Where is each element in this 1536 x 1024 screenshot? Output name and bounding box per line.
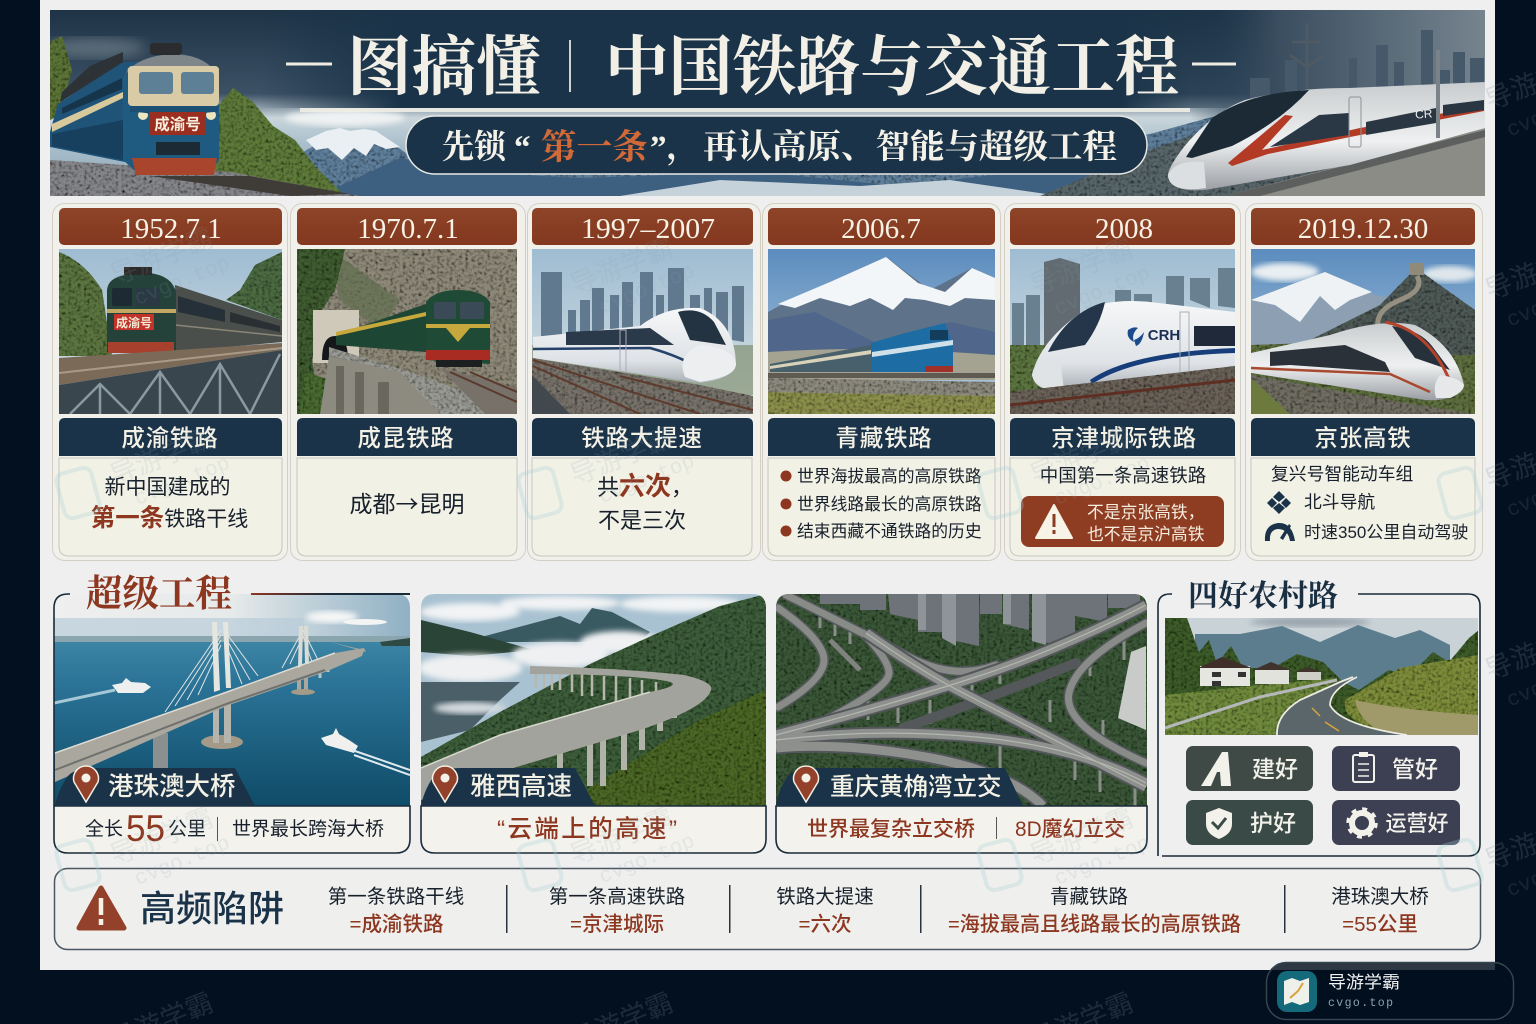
main title: 图搞懂	[347, 32, 541, 104]
strip	[776, 806, 1147, 853]
frame	[54, 594, 70, 806]
photo: CRH train: CRH	[1148, 327, 1180, 344]
watermarks: 导游学霸	[1026, 803, 1137, 871]
icon: speedometer	[1265, 523, 1295, 541]
body: 共六次，	[597, 471, 693, 501]
trap 1	[328, 886, 464, 936]
header banner	[45, 10, 1485, 196]
train name plate: 成渝号	[154, 114, 201, 134]
panel: 雅西高速	[418, 594, 766, 853]
heading: 高频陷阱	[140, 888, 284, 929]
watermarks: cvgo.top	[132, 253, 234, 312]
date tab	[1010, 208, 1235, 245]
name band	[768, 418, 995, 456]
trap 5: =55公里	[1342, 913, 1418, 936]
stats: 全长	[85, 818, 123, 840]
name band	[297, 418, 517, 456]
label tab: 港珠澳大桥	[108, 773, 236, 801]
date tab: 2008	[1095, 213, 1153, 245]
label tab: 重庆黄桷湾立交	[830, 773, 1002, 801]
trap 3: =六次	[799, 913, 851, 936]
stats: 世界最长跨海大桥	[232, 818, 384, 840]
body: 北斗导航	[1304, 492, 1375, 512]
label tab	[55, 766, 255, 806]
quote: “云端上的高速”	[497, 815, 677, 843]
watermarks: cvgo.top	[1052, 833, 1154, 892]
date tab: 1970.7.1	[357, 213, 459, 245]
card 3: 铁路大提速	[528, 204, 760, 560]
body	[297, 458, 517, 556]
warning callout: 也不是京沪高铁	[1087, 525, 1205, 544]
section heading: 超级工程: 超级工程	[86, 573, 232, 615]
name band: 京张高铁	[1314, 425, 1412, 451]
button: 运营好	[1332, 800, 1460, 845]
watermarks: cvgo.top	[1052, 453, 1154, 512]
stats: 公里	[168, 819, 206, 840]
watermarks: 导游学霸	[1026, 423, 1137, 491]
date tab	[297, 208, 517, 245]
name band: 铁路大提速	[581, 425, 703, 451]
main title: 中国铁路与交通工程	[605, 32, 1179, 104]
card 6: 京张高铁	[1246, 204, 1482, 560]
left blue locomotive	[50, 43, 219, 175]
body: 成都→昆明	[350, 485, 464, 519]
body: 世界线路最长的高原铁路	[797, 495, 982, 514]
name band: 成昆铁路	[357, 425, 455, 451]
watermarks: cvgo.top	[1052, 263, 1154, 322]
warning callout: 不是京张高铁，	[1087, 503, 1204, 522]
body: 中国第一条高速铁路	[1040, 465, 1206, 486]
subtitle pill: ”，	[650, 130, 700, 166]
photo: CRH train	[1010, 249, 1235, 414]
cream divider	[300, 108, 1190, 112]
strip	[54, 806, 410, 853]
date tab: 1952.7.1	[120, 213, 222, 245]
trap 3	[776, 886, 874, 936]
date tab	[1251, 208, 1475, 245]
body	[59, 458, 282, 556]
captions: 世界最复杂立交桥	[807, 818, 975, 841]
photo: rural road	[1165, 617, 1491, 735]
body	[1010, 458, 1235, 556]
date tab	[768, 208, 995, 245]
watermarks: 导游学霸	[566, 803, 677, 871]
card 4: 青藏铁路	[762, 204, 1000, 560]
captions	[807, 817, 1125, 841]
body	[1251, 458, 1475, 556]
train name plate	[150, 112, 205, 135]
photo: Fuxing train and Great Wall	[1251, 249, 1478, 414]
body: 新中国建成的	[104, 476, 230, 499]
icon: Beidou navigation	[1267, 491, 1291, 514]
body	[532, 458, 752, 556]
body: 不是三次	[598, 508, 686, 533]
date tab: 2019.12.30	[1298, 213, 1428, 245]
watermarks: cvgo.top	[596, 831, 698, 890]
body	[768, 458, 995, 556]
button: 管好	[1332, 746, 1460, 791]
date tab: 2006.7	[841, 213, 921, 245]
photo: green locomotive on bridge: 成渝号	[116, 315, 152, 330]
captions: 8D魔幻立交	[1015, 818, 1125, 841]
trap 4	[948, 886, 1241, 936]
label tab: 雅西高速	[470, 773, 572, 801]
right high-speed train	[1168, 50, 1485, 196]
trap 5: 港珠澳大桥	[1331, 886, 1429, 908]
stats: 55	[126, 808, 165, 849]
name band	[1251, 418, 1475, 456]
warning callout	[1021, 496, 1224, 547]
subtitle pill	[406, 116, 1147, 174]
stats	[85, 808, 384, 849]
icon: warning triangle	[79, 888, 124, 928]
photo: green locomotive on bridge	[59, 249, 282, 414]
trap 1: =成渝铁路	[350, 913, 444, 936]
trap 1: 第一条铁路干线	[328, 886, 464, 908]
watermarks: 导游学霸	[566, 423, 677, 491]
label tab	[776, 766, 1023, 806]
strip	[421, 806, 766, 853]
name band: 青藏铁路	[835, 425, 933, 451]
trap 3: 铁路大提速	[776, 886, 874, 908]
high-frequency traps bar	[54, 868, 1480, 950]
watermarks: cvgo.top	[596, 261, 698, 320]
button: 护好: 护好	[1250, 810, 1296, 836]
subtitle pill: 先锁	[442, 129, 508, 166]
watermarks: cvgo.top	[132, 453, 234, 512]
name band	[1010, 418, 1235, 456]
button: 建好	[1186, 746, 1313, 791]
brand badge	[1266, 962, 1514, 1020]
trap 2: 第一条高速铁路	[549, 886, 685, 908]
main title	[286, 32, 1236, 104]
watermarks: cvgo.top	[596, 451, 698, 510]
subtitle pill: 第一条	[541, 128, 648, 167]
name band	[532, 418, 753, 456]
button: 护好	[1186, 800, 1313, 845]
photo: blue train under snow mountains	[768, 249, 995, 414]
watermarks: 导游学霸	[106, 423, 217, 491]
watermarks: 导游学霸	[106, 803, 217, 871]
name band	[59, 418, 282, 456]
right high-speed train: CR	[1415, 106, 1433, 122]
panel: 超级工程 bridge	[54, 594, 410, 853]
body: 世界海拔最高的高原铁路	[797, 467, 982, 486]
watermarks: 导游学霸	[566, 233, 677, 301]
card 5: 京津城际铁路	[1004, 204, 1240, 560]
brand badge: cvgo.top	[1328, 997, 1393, 1010]
body: 复兴号智能动车组	[1271, 464, 1413, 484]
subtitle pill: “	[514, 130, 530, 166]
heading: 四好农村路	[1188, 580, 1338, 613]
name band: 京津城际铁路	[1051, 425, 1197, 451]
watermarks: 导游学霸	[1026, 233, 1137, 301]
button: 运营好: 运营好	[1386, 811, 1448, 836]
body: 结束西藏不通铁路的历史	[797, 522, 982, 541]
body: 时速350公里自动驾驶	[1304, 523, 1468, 542]
trap 5	[1331, 886, 1429, 936]
brand badge: 导游学霸	[1328, 973, 1400, 992]
icon: map logo	[1277, 971, 1317, 1012]
date tab	[532, 208, 753, 245]
body: 第一条铁路干线	[91, 504, 248, 532]
label tab	[421, 766, 595, 806]
date tab: 1997–2007	[581, 213, 715, 245]
date tab	[59, 208, 282, 245]
photo: white train with skyline	[532, 249, 753, 414]
photo: locomotive leaving tunnel	[297, 249, 517, 414]
trap 2	[549, 886, 685, 936]
button: 建好: 建好	[1252, 756, 1298, 782]
trap 2: =京津城际	[570, 913, 664, 936]
panel: 重庆黄桷湾立交	[776, 594, 1147, 853]
watermarks: cvgo.top	[132, 833, 234, 892]
trap 4: 青藏铁路	[1050, 886, 1128, 908]
button: 管好: 管好	[1392, 756, 1438, 782]
name band: 成渝铁路	[121, 425, 219, 451]
card 1: 成渝铁路	[52, 204, 288, 560]
card 2: 成昆铁路	[290, 204, 526, 560]
watermarks: 导游学霸	[106, 223, 217, 291]
panel: 四好农村路	[1158, 580, 1491, 856]
trap 4: =海拔最高且线路最长的高原铁路	[948, 913, 1241, 936]
subtitle pill: 再认高原、智能与超级工程	[703, 129, 1118, 166]
